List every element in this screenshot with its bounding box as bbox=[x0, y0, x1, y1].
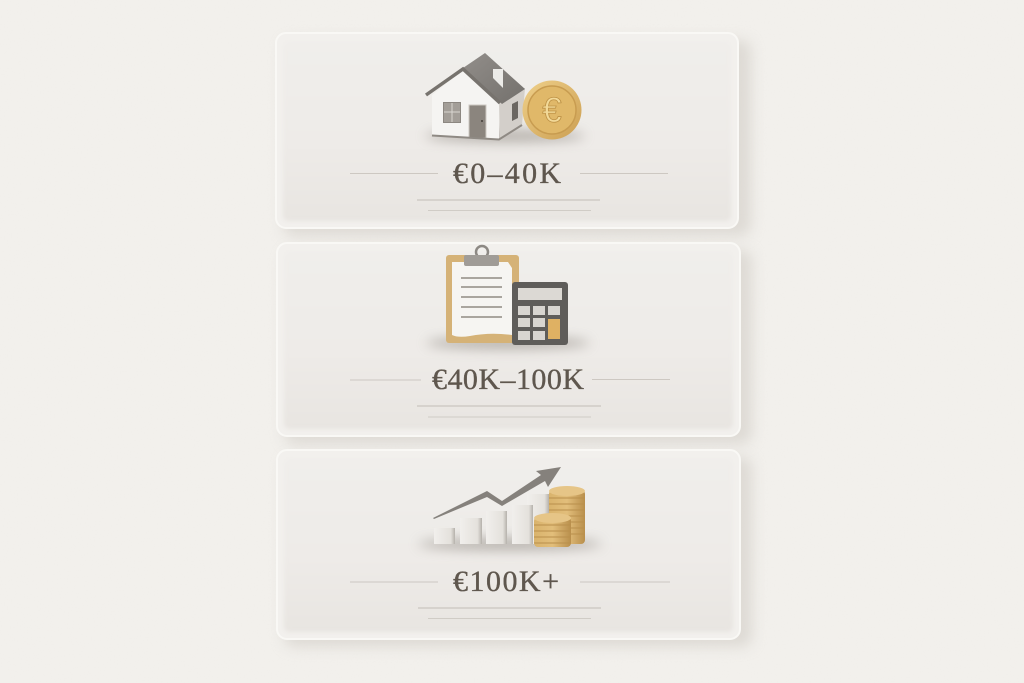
arrow: growth trend bbox=[433, 467, 561, 519]
heading: range 100K plus: €100K+ bbox=[453, 565, 559, 598]
panel: tier 40K to 100K bbox=[277, 243, 752, 444]
panel: tier 0 to 40K bbox=[276, 33, 751, 236]
panel: tier 100K plus bbox=[277, 450, 752, 647]
icon: rising bar chart with coin stacks bbox=[418, 467, 602, 550]
icon: clipboard and calculator bbox=[426, 246, 590, 349]
icon glyph: euro sign: € bbox=[542, 91, 562, 130]
heading: range 0 to 40K: €0–40K bbox=[453, 157, 561, 190]
icon: house with euro coin bbox=[425, 53, 585, 142]
heading: range 40K to 100K: €40K–100K bbox=[432, 363, 584, 396]
